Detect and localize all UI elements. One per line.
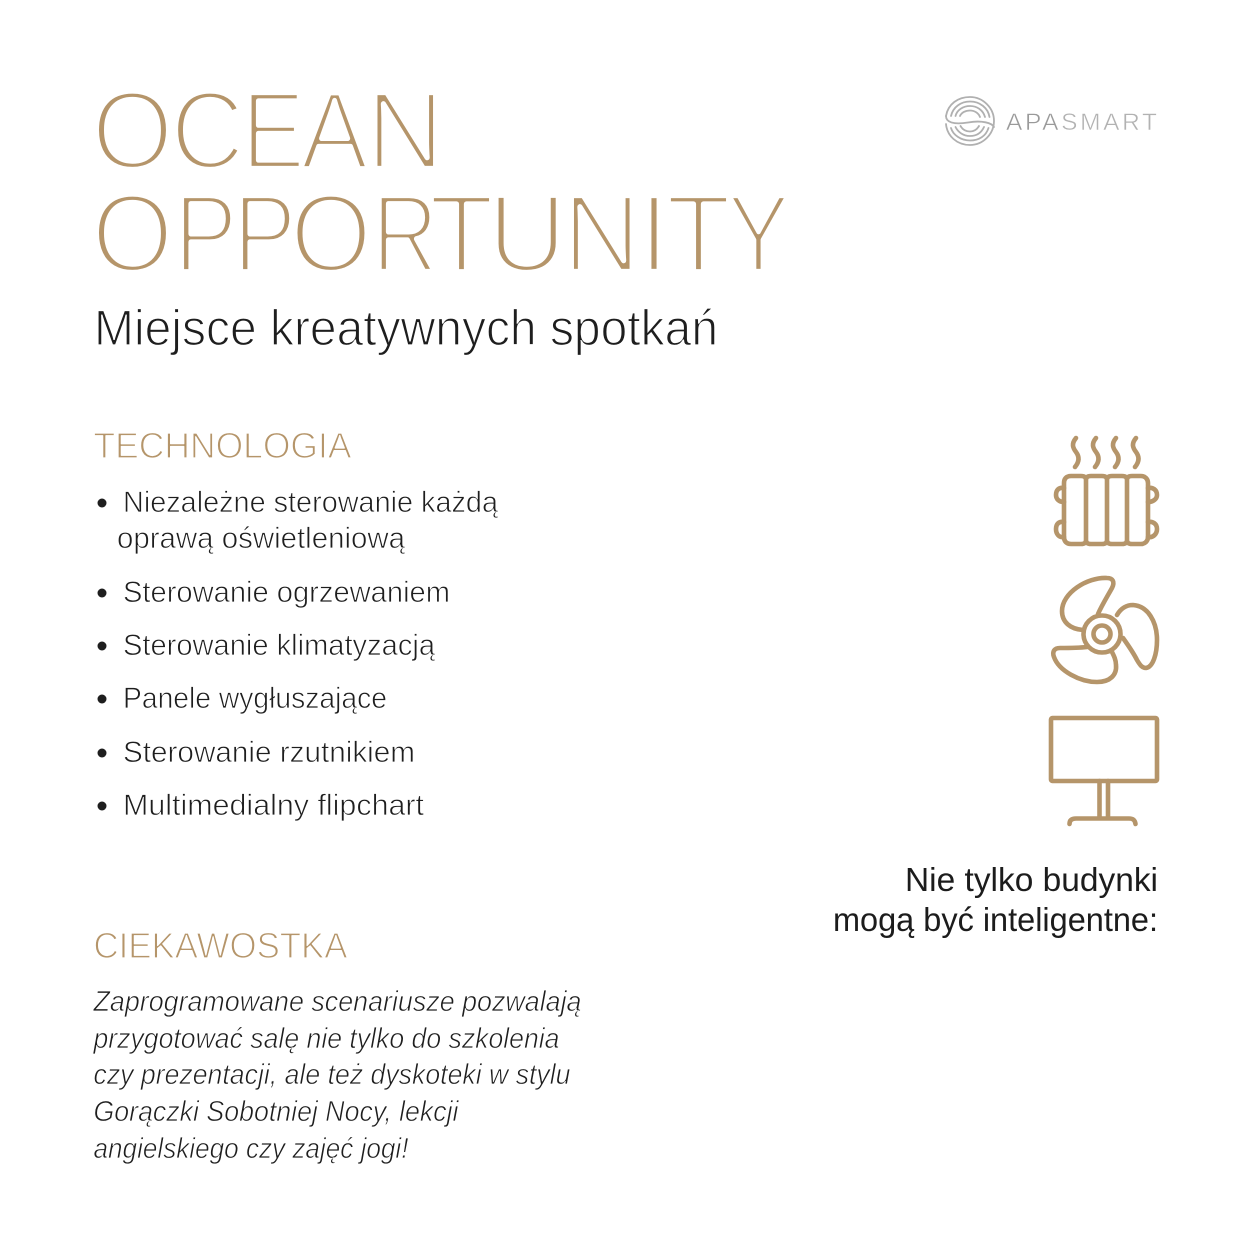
title: Y <box>727 173 790 296</box>
text block: fun fact: przygotować salę nie tylko do szkolenia <box>93 1023 560 1055</box>
title: P <box>174 173 238 296</box>
list item: heating: Sterowanie ogrzewaniem <box>123 576 450 609</box>
title: P <box>233 173 296 296</box>
title: I <box>638 173 670 296</box>
title: A <box>300 70 369 193</box>
caption: smart not only buildings: mogą być inteligentne: <box>833 901 1158 938</box>
title: O <box>290 173 372 296</box>
title <box>92 70 790 296</box>
list item: lighting <box>98 486 498 555</box>
list item: acoustic panels: Panele wygłuszające <box>123 682 387 715</box>
text block: fun fact: Gorączki Sobotniej Nocy, lekcji <box>94 1096 460 1128</box>
list item: air conditioning: Sterowanie klimatyzacją <box>123 629 435 662</box>
text block: fun fact: czy prezentacji, ale też dyskoteki w stylu <box>94 1059 570 1091</box>
title: E <box>242 70 305 193</box>
text block: fun fact: angielskiego czy zajęć jogi! <box>94 1133 408 1165</box>
title: O <box>92 173 174 296</box>
title: U <box>488 173 567 296</box>
subtitle: Miejsce kreatywnych spotkań <box>94 300 718 356</box>
title: O <box>92 70 174 193</box>
caption: smart not only buildings <box>833 861 1158 938</box>
text block: fun fact: Zaprogramowane scenariusze pozwalają <box>93 986 582 1018</box>
icon: radiator <box>1056 438 1157 544</box>
title: C <box>170 70 244 193</box>
list item: lighting: Niezależne sterowanie każdą <box>123 486 498 519</box>
logo wordmark: APASMART <box>1006 109 1157 136</box>
icon: logo swirl <box>946 97 994 145</box>
heading: Technologia: TECHNOLOGIA <box>94 425 352 466</box>
list item: flipchart: Multimedialny flipchart <box>123 789 425 822</box>
title: N <box>562 173 641 296</box>
list item: projector: Sterowanie rzutnikiem <box>123 736 415 769</box>
logo: Apasmart <box>946 97 1157 145</box>
title: N <box>366 70 444 193</box>
list item: lighting: oprawą oświetleniową <box>117 522 405 555</box>
title: R <box>372 173 438 296</box>
caption: smart not only buildings: Nie tylko budynki <box>905 861 1158 898</box>
heading: Ciekawostka: CIEKAWOSTKA <box>94 925 348 966</box>
title: T <box>666 173 731 296</box>
icon: screen on stand <box>1051 718 1157 824</box>
icon: fan <box>1053 578 1157 682</box>
list: technology features <box>98 486 498 822</box>
title: T <box>429 173 494 296</box>
text block: fun fact <box>93 986 582 1165</box>
